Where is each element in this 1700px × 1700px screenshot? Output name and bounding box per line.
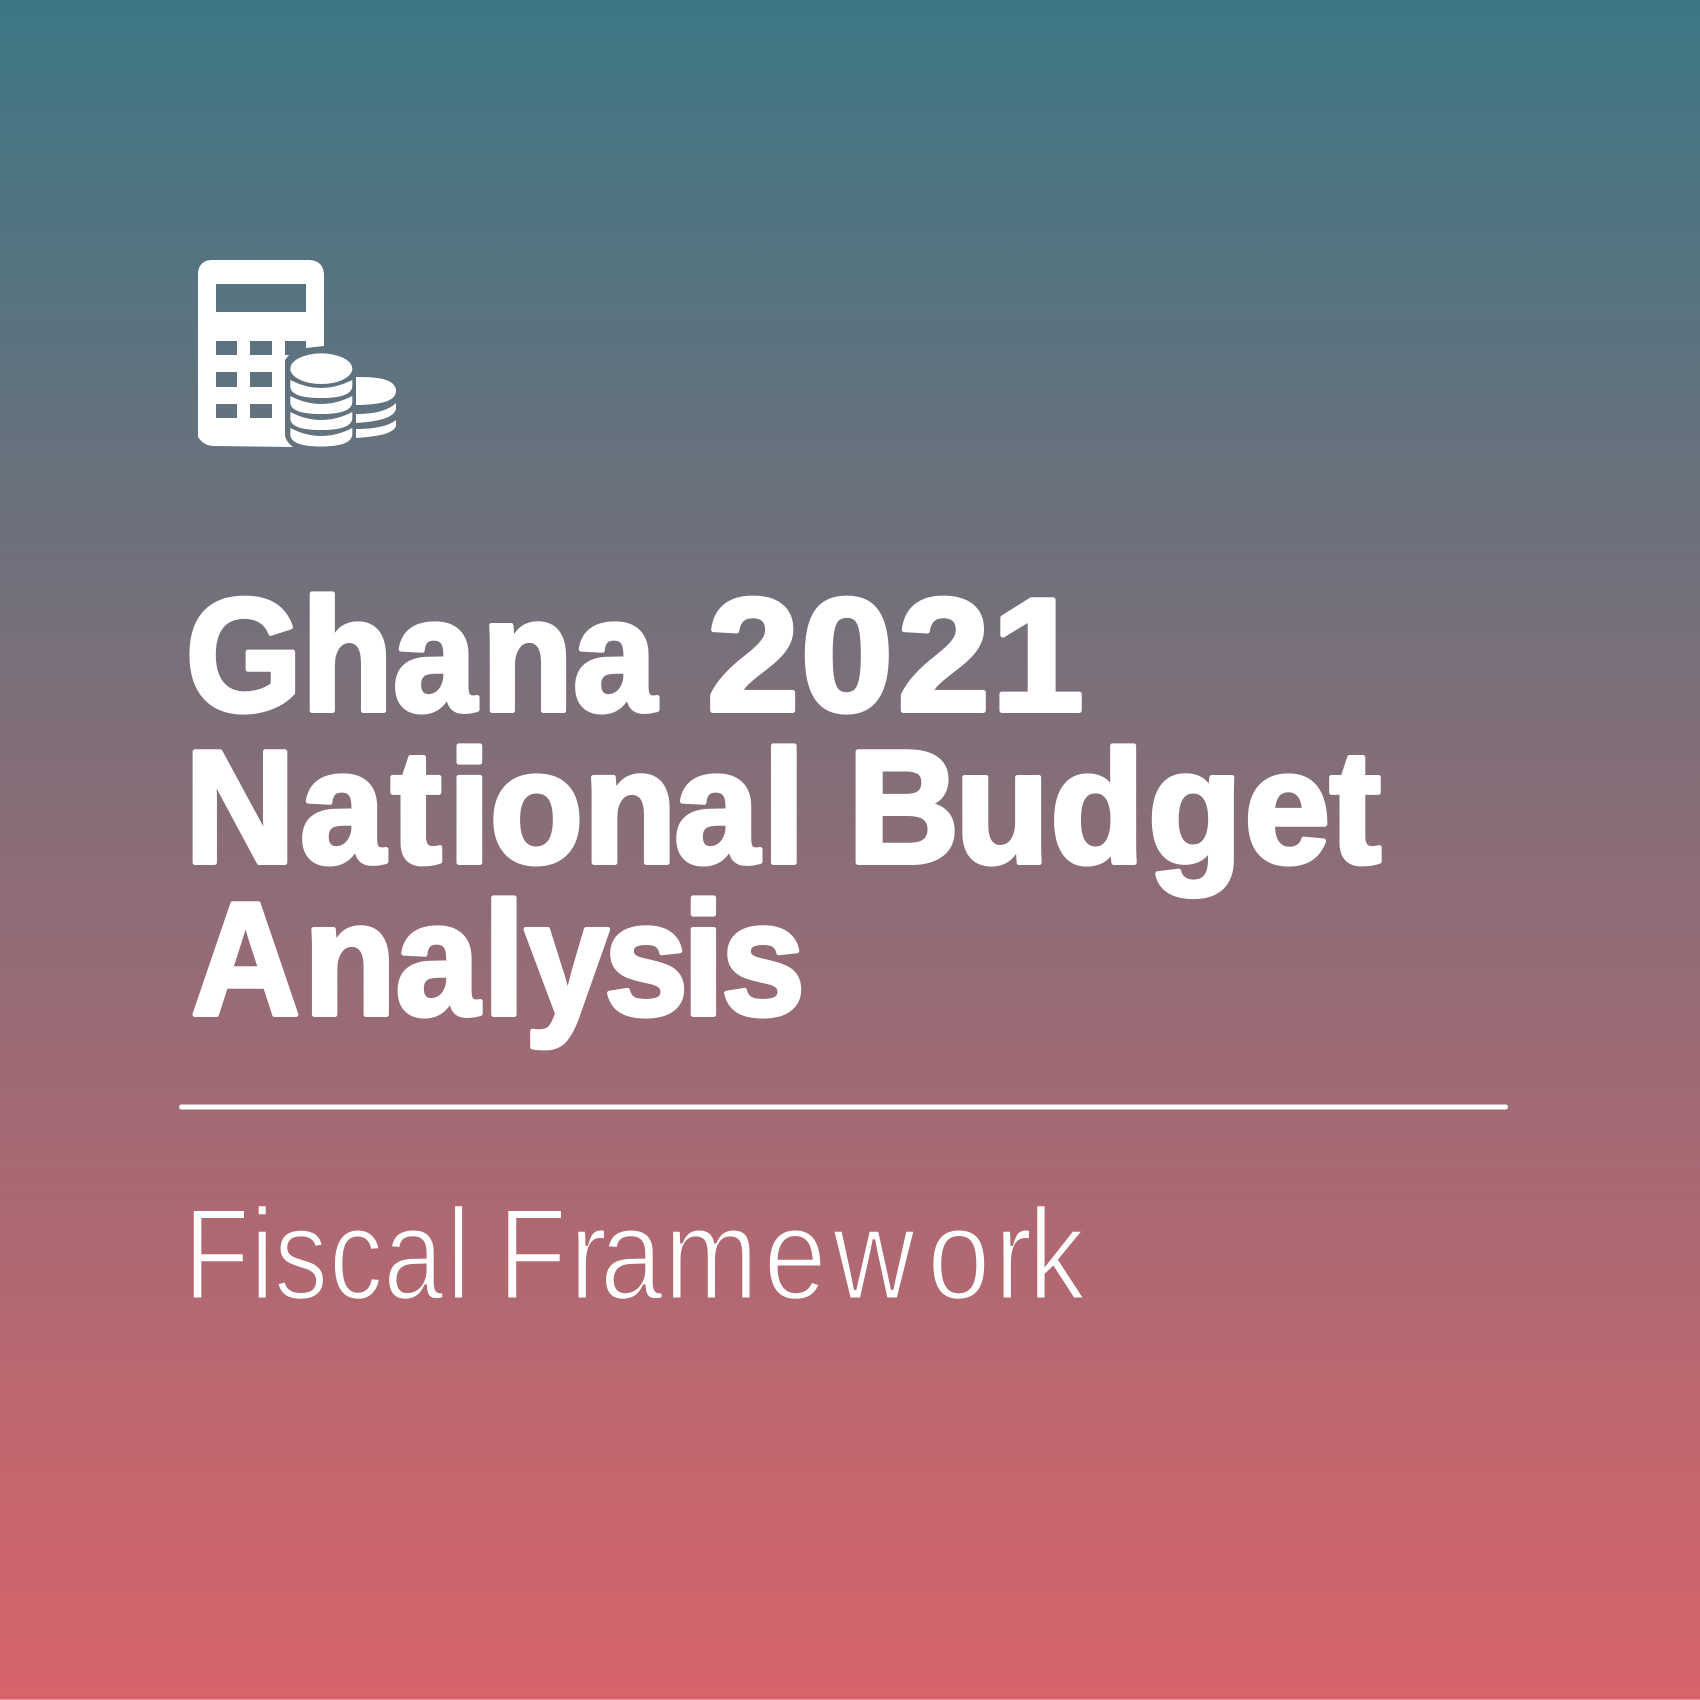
title: National bbox=[185, 718, 805, 897]
title: Ghana bbox=[186, 564, 658, 745]
title: 2021 bbox=[707, 565, 1084, 745]
subtitle bbox=[184, 1182, 1086, 1327]
title bbox=[185, 564, 1381, 1050]
subtitle: Framework bbox=[498, 1182, 1086, 1327]
icon: calculator bbox=[198, 260, 324, 447]
subtitle: Fiscal bbox=[184, 1183, 471, 1327]
title: Analysis bbox=[191, 870, 805, 1050]
icon: calculator and coin stacks bbox=[198, 260, 396, 447]
icon: small coin stack bbox=[356, 377, 396, 438]
divider rule bbox=[179, 1104, 1508, 1110]
title: Budget bbox=[848, 718, 1381, 897]
icon: large coin stack bbox=[290, 353, 352, 446]
